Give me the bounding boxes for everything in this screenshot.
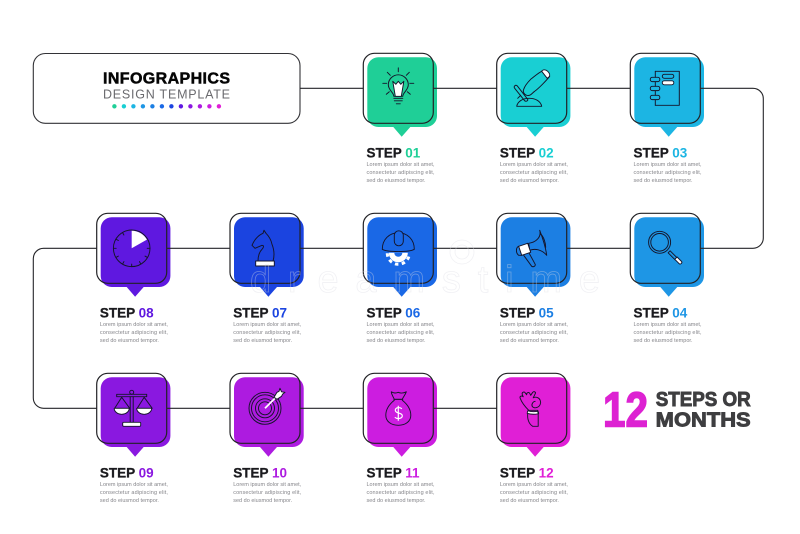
step 08 description: sed do eiusmod tempor. bbox=[100, 338, 159, 344]
step 10 description: Lorem ipsum dolor sit amet, bbox=[233, 482, 302, 488]
step 06 label: STEP 06 bbox=[366, 305, 421, 320]
step 05 description: consectetur adipiscing elit, bbox=[500, 330, 568, 336]
step 05 bbox=[497, 213, 570, 344]
step 03 label: STEP 03 bbox=[633, 145, 688, 160]
step 11 description: consectetur adipiscing elit, bbox=[366, 490, 435, 496]
step 03 description: consectetur adipiscing elit, bbox=[633, 170, 702, 176]
step 12 description: Lorem ipsum dolor sit amet, bbox=[500, 482, 568, 488]
icon: light bulb bbox=[383, 68, 414, 104]
step 08 bbox=[97, 213, 170, 344]
step 03 bbox=[630, 53, 704, 184]
icon: megaphone bbox=[516, 230, 547, 267]
step 09 description bbox=[100, 482, 168, 504]
step 09 description: Lorem ipsum dolor sit amet, bbox=[100, 482, 168, 488]
step 09 description: sed do eiusmod tempor. bbox=[100, 498, 159, 504]
step 06 bbox=[363, 213, 437, 344]
step 05 description: sed do eiusmod tempor. bbox=[500, 338, 559, 344]
step 10 label: STEP 10 bbox=[233, 465, 287, 480]
step 12 bbox=[497, 373, 570, 504]
step 08 description: consectetur adipiscing elit, bbox=[100, 330, 168, 336]
icon: OK hand bbox=[520, 392, 541, 426]
step 12 label: STEP 12 bbox=[500, 465, 554, 480]
step 09 description: consectetur adipiscing elit, bbox=[100, 490, 168, 496]
step 10 description: sed do eiusmod tempor. bbox=[233, 498, 293, 504]
step 04 description: Lorem ipsum dolor sit amet, bbox=[633, 322, 702, 328]
watermark bbox=[250, 240, 600, 301]
step 03 description bbox=[634, 162, 702, 184]
step 09 label: STEP 09 bbox=[100, 465, 154, 480]
step 10 description: consectetur adipiscing elit, bbox=[233, 490, 302, 496]
title panel bbox=[33, 54, 300, 123]
step 05 label: STEP 05 bbox=[500, 305, 554, 320]
icon: magnifier bbox=[649, 231, 682, 264]
step 04 bbox=[630, 213, 704, 344]
step 05 description: Lorem ipsum dolor sit amet, bbox=[500, 322, 568, 328]
step 02 label: STEP 02 bbox=[500, 145, 554, 160]
step 03 description: sed do eiusmod tempor. bbox=[633, 178, 693, 184]
steps or months caption: MONTHS bbox=[656, 409, 751, 432]
step 06 description: Lorem ipsum dolor sit amet, bbox=[366, 322, 435, 328]
step 02 description: consectetur adipiscing elit, bbox=[500, 170, 568, 176]
step 06 description: sed do eiusmod tempor. bbox=[366, 338, 426, 344]
icon: microscope bbox=[514, 70, 550, 106]
icon: target and arrow bbox=[249, 388, 285, 424]
step 07 description bbox=[233, 322, 302, 344]
title: INFOGRAPHICS bbox=[103, 70, 230, 87]
step 01 description: sed do eiusmod tempor. bbox=[366, 178, 426, 184]
icon: clock bbox=[113, 230, 150, 267]
steps or months caption bbox=[656, 388, 751, 432]
step 12 description: sed do eiusmod tempor. bbox=[500, 498, 559, 504]
step 07 description: Lorem ipsum dolor sit amet, bbox=[233, 322, 302, 328]
step 08 description bbox=[100, 322, 168, 344]
step 08 label: STEP 08 bbox=[100, 305, 154, 320]
step 01 description: Lorem ipsum dolor sit amet, bbox=[366, 162, 435, 168]
icon: chess knight bbox=[252, 230, 274, 266]
step 11 description bbox=[366, 482, 435, 504]
step 02 description: Lorem ipsum dolor sit amet, bbox=[500, 162, 568, 168]
step 01 description bbox=[366, 162, 435, 184]
icon: helmet and gear bbox=[382, 231, 414, 264]
subtitle: DESIGN TEMPLATE bbox=[103, 87, 230, 101]
step 03 description: Lorem ipsum dolor sit amet, bbox=[633, 162, 702, 168]
step 01 description: consectetur adipiscing elit, bbox=[366, 170, 435, 176]
step 12 description: consectetur adipiscing elit, bbox=[500, 490, 568, 496]
icon: notebook bbox=[650, 71, 679, 105]
step 01 bbox=[363, 53, 437, 184]
step 11 description: Lorem ipsum dolor sit amet, bbox=[366, 482, 435, 488]
step 04 label: STEP 04 bbox=[633, 305, 688, 320]
step 12 description bbox=[500, 482, 568, 504]
icon: balance scale bbox=[114, 390, 152, 426]
big number 12: 12 bbox=[603, 384, 648, 438]
step 01 label: STEP 01 bbox=[366, 145, 421, 160]
steps or months caption: STEPS OR bbox=[656, 388, 751, 411]
step 02 bbox=[497, 53, 570, 184]
step 02 description bbox=[500, 162, 568, 184]
step 06 description: consectetur adipiscing elit, bbox=[366, 330, 435, 336]
step 02 description: sed do eiusmod tempor. bbox=[500, 178, 559, 184]
watermark: dreamstime bbox=[250, 259, 600, 301]
step 07 label: STEP 07 bbox=[233, 305, 287, 320]
step 07 description: consectetur adipiscing elit, bbox=[233, 330, 302, 336]
step 11 description: sed do eiusmod tempor. bbox=[366, 498, 426, 504]
icon: money bag bbox=[386, 392, 411, 425]
step 07 description: sed do eiusmod tempor. bbox=[233, 338, 293, 344]
step 04 description bbox=[634, 322, 702, 344]
step 10 bbox=[230, 373, 304, 504]
colour dots bbox=[112, 104, 221, 109]
step 04 description: consectetur adipiscing elit, bbox=[633, 330, 702, 336]
step 04 description: sed do eiusmod tempor. bbox=[633, 338, 693, 344]
step 08 description: Lorem ipsum dolor sit amet, bbox=[100, 322, 168, 328]
step 11 bbox=[363, 373, 437, 504]
step 05 description bbox=[500, 322, 568, 344]
connector path bbox=[33, 88, 763, 408]
step 06 description bbox=[366, 322, 435, 344]
step 09 bbox=[97, 373, 170, 504]
step 07 bbox=[230, 213, 304, 344]
step 10 description bbox=[233, 482, 302, 504]
step 11 label: STEP 11 bbox=[366, 465, 420, 480]
